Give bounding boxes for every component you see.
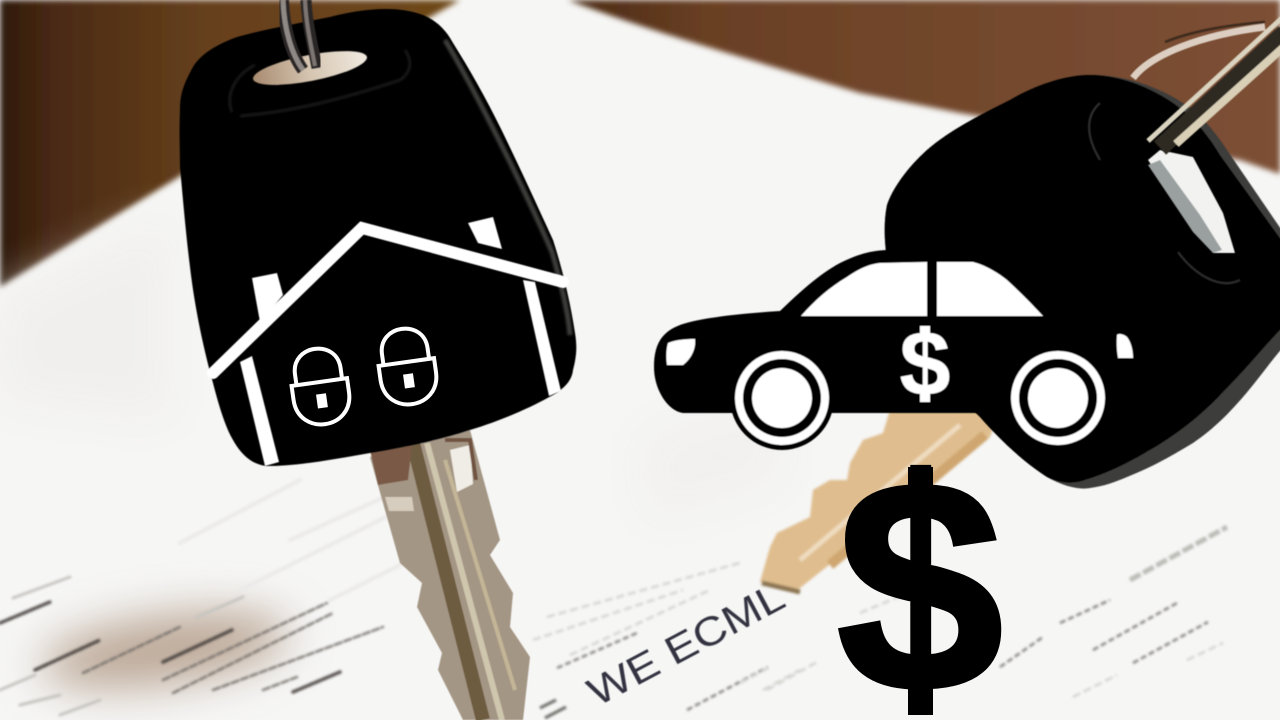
tail light	[1117, 334, 1133, 358]
key: fob hole	[1089, 103, 1240, 283]
key: right fob	[885, 75, 1280, 489]
car body	[654, 250, 1137, 413]
left chimney	[252, 273, 283, 322]
key: ring	[283, 0, 317, 70]
car windows	[801, 262, 927, 316]
roof	[213, 228, 563, 373]
key: fob edge highlight	[445, 40, 570, 335]
key: metal ring	[1133, 18, 1280, 148]
key: left fob	[180, 9, 576, 466]
rear wheel	[1006, 346, 1110, 450]
right chimney	[468, 217, 502, 249]
right wall	[523, 280, 561, 396]
headlight	[666, 339, 695, 365]
front wheel	[730, 346, 834, 450]
background: brown table top left	[0, 0, 460, 287]
paper shading smudge	[0, 220, 780, 701]
car dollar sign: $	[899, 313, 951, 415]
background: brown table top right	[568, 0, 1280, 174]
icon: house outline	[213, 217, 563, 466]
document text lines, left	[0, 480, 400, 715]
key: gold blade	[760, 410, 1000, 592]
key: fob recess	[230, 50, 410, 116]
document text lines, right	[533, 527, 1227, 718]
left wall	[240, 356, 279, 466]
left house key	[180, 0, 576, 720]
right car key	[760, 18, 1280, 592]
key: fob hole	[251, 44, 369, 92]
key: metal blade	[370, 430, 530, 720]
icon: car with dollar	[654, 250, 1137, 450]
document heading text: WE ECML	[581, 575, 792, 715]
icon: right padlock	[374, 325, 440, 408]
icon: left padlock	[287, 345, 353, 428]
